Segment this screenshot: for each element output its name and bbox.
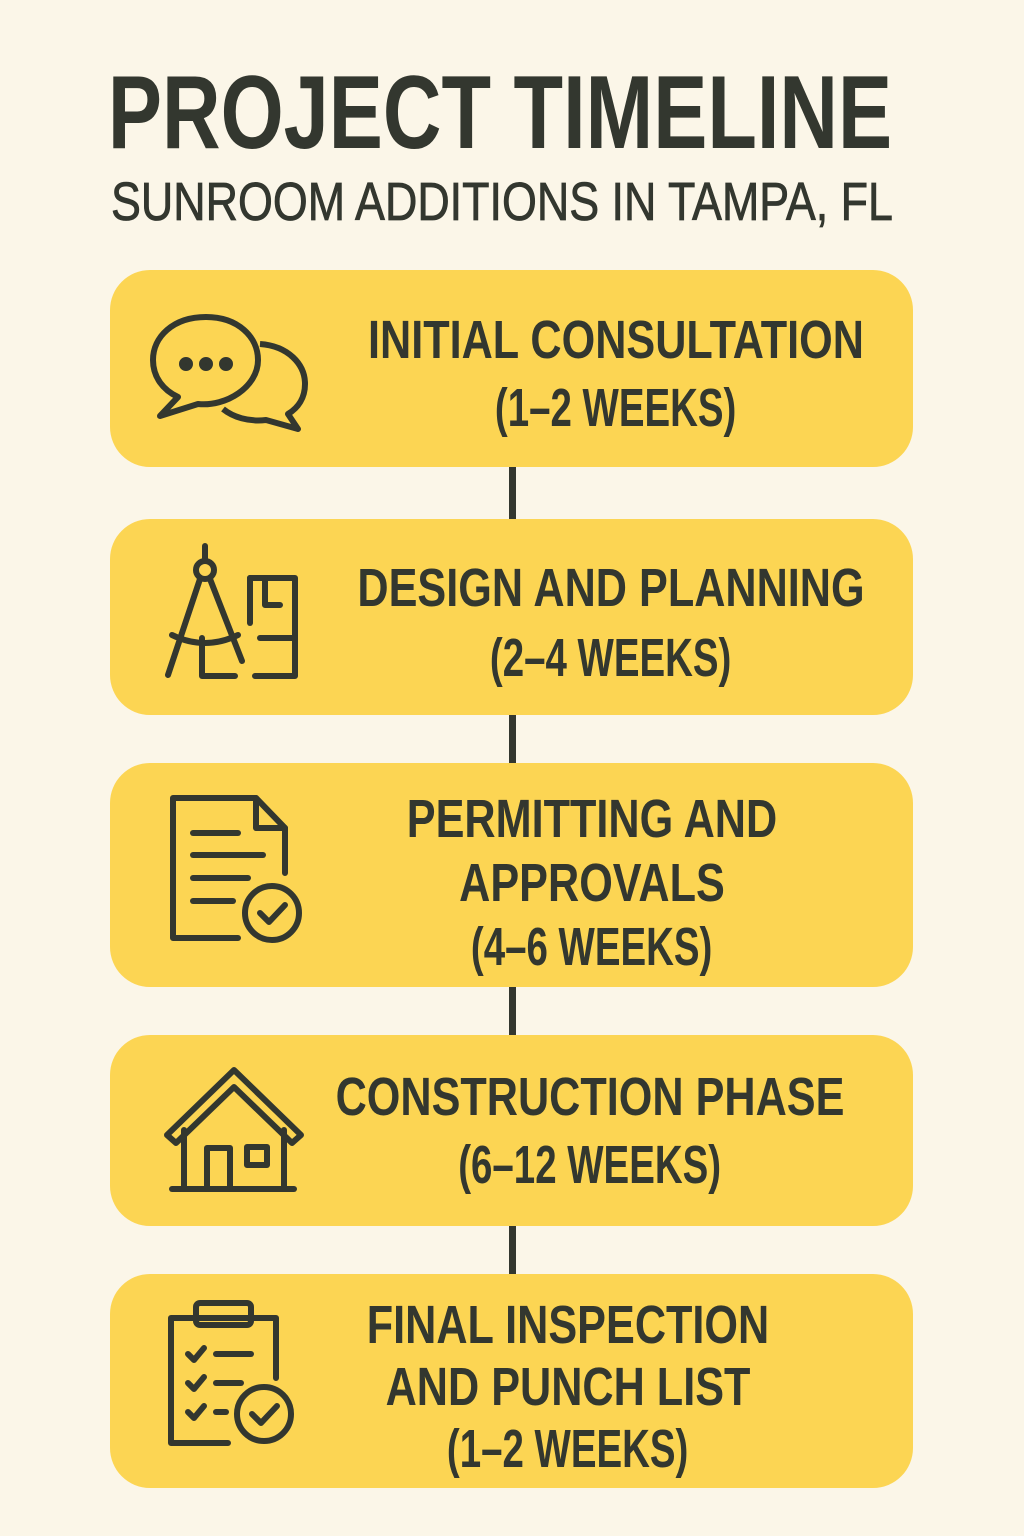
panel: permitting and approvals [110,763,913,987]
text [407,789,777,977]
text: (1–2 WEEKS) [495,378,737,438]
text: (4–6 WEEKS) [471,917,713,977]
text: AND PUNCH LIST [386,1357,750,1417]
connector lines [509,467,516,1274]
icon: house [164,1067,304,1192]
text: (1–2 WEEKS) [447,1419,689,1479]
text [357,558,865,688]
text [368,310,864,438]
text: (6–12 WEEKS) [459,1135,721,1195]
panel: construction phase [110,1035,913,1226]
text: DESIGN AND PLANNING [357,558,865,618]
text: PERMITTING AND [407,789,777,849]
panel: final inspection [110,1274,913,1488]
icon: chat bubbles [150,314,308,432]
icon: compass and floor plan [165,543,298,679]
text: FINAL INSPECTION [367,1295,769,1355]
title: PROJECT TIMELINE [108,55,892,171]
subtitle: SUNROOM ADDITIONS IN TAMPA, FL [111,172,893,232]
panel: initial consultation [110,270,913,467]
text [367,1295,769,1479]
text: APPROVALS [459,853,725,913]
panel: design and planning [110,519,913,715]
icon: document with check [170,795,302,943]
text: CONSTRUCTION PHASE [336,1067,844,1127]
icon: clipboard checklist [168,1300,294,1446]
text: (2–4 WEEKS) [490,628,732,688]
text [336,1067,844,1195]
text: INITIAL CONSULTATION [368,310,864,370]
